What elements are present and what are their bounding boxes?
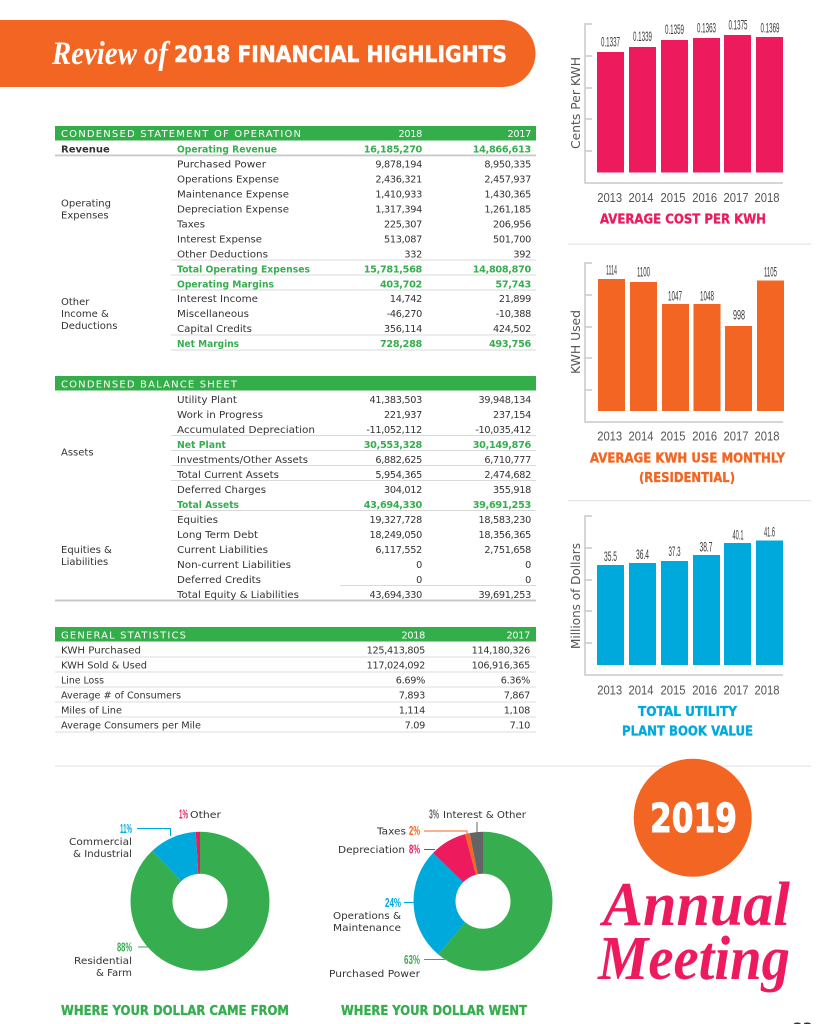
2018 values <box>367 646 425 732</box>
section labels: Equities & <box>61 545 112 556</box>
2017 values: 237,154 <box>493 410 531 421</box>
2017 values: 14,866,613 <box>473 144 531 156</box>
chart title: AVERAGE KWH USE MONTHLY <box>590 450 785 466</box>
year labels: 2017 <box>724 430 749 444</box>
table header: CONDENSED BALANCE SHEET <box>61 380 238 390</box>
statistic names: Line Loss <box>61 676 104 686</box>
bar chart: average cost per KWH <box>569 18 783 228</box>
2018 values: 6,882,625 <box>375 455 422 466</box>
2017 values: 0 <box>525 560 531 571</box>
line items: Work in Progress <box>177 410 263 421</box>
line items: Equities <box>177 515 218 526</box>
table header <box>55 376 536 390</box>
year labels: 2016 <box>692 430 717 444</box>
title banner <box>0 20 536 87</box>
bars <box>597 540 783 665</box>
chart title: PLANT BOOK VALUE <box>622 724 753 740</box>
axis title: KWH Used <box>569 310 583 374</box>
bars <box>598 279 784 411</box>
bar chart: average cost per KWH: 0.1369 <box>760 20 780 36</box>
2017 values: 14,808,870 <box>473 264 532 276</box>
2017 values: 6.36% <box>501 676 530 686</box>
2017 values: 6,710,777 <box>484 455 531 466</box>
orange year circle: 2019 <box>650 796 737 842</box>
value labels: 0.1339 <box>633 29 652 44</box>
label: taxes: 2% <box>409 823 420 838</box>
bar chart: average KWH use monthly: 1105 <box>764 264 777 280</box>
value labels: 1100 <box>637 264 650 280</box>
label: depreciation: 8% <box>409 842 420 856</box>
label: other: 1% <box>179 806 188 822</box>
year labels: 2015 <box>660 684 686 698</box>
2018 values: 43,694,330 <box>364 500 423 511</box>
line items: Other Deductions <box>177 250 268 260</box>
axis title: Millions of Dollars <box>569 543 583 649</box>
2017 values: 57,743 <box>495 280 531 290</box>
2018 values: 1,317,394 <box>375 204 422 216</box>
line items: Current Liabilities <box>177 545 268 556</box>
line items: Net Plant <box>177 440 226 451</box>
line items: Interest Expense <box>177 234 262 246</box>
2018 values: 18,249,050 <box>370 530 422 541</box>
section labels: Other <box>61 297 90 308</box>
year labels: 2014 <box>628 684 654 698</box>
year labels <box>597 191 780 205</box>
label: interest and other <box>429 806 527 822</box>
table header: 2018 <box>402 630 425 642</box>
value labels: 1047 <box>668 288 682 304</box>
2017 values: 355,918 <box>493 485 531 496</box>
value labels: 1048 <box>700 288 714 304</box>
line items: Total Equity & Liabilities <box>176 590 299 601</box>
2017 values <box>473 395 532 601</box>
label: commercial and industrial: Commercial <box>69 837 132 848</box>
line items: Accumulated Depreciation <box>177 425 315 436</box>
2018 values: 16,185,270 <box>364 144 423 156</box>
line items: Operating Revenue <box>177 144 277 156</box>
2017 values: 39,691,253 <box>479 590 531 601</box>
2018 values: 19,327,728 <box>370 515 422 526</box>
value labels: 38.7 <box>700 540 712 554</box>
label: interest and other: 3% <box>429 806 439 822</box>
2018 values: 0 <box>416 575 422 586</box>
2017 values: 30,149,876 <box>473 440 532 451</box>
line items: Miscellaneous <box>177 309 249 320</box>
label: commercial and industrial <box>69 821 132 860</box>
label: residential and farm: Residential <box>74 956 132 967</box>
2017 values: 392 <box>513 250 531 260</box>
label: depreciation <box>338 842 420 856</box>
leader lines <box>137 828 170 947</box>
line items: Deferred Credits <box>177 575 261 586</box>
2017 values <box>473 144 532 350</box>
label: taxes <box>376 823 420 838</box>
year labels: 2017 <box>724 684 749 698</box>
2018 values: 1,410,933 <box>375 190 422 200</box>
section labels: Income & <box>61 309 109 320</box>
line items: Interest Income <box>177 294 258 305</box>
2018 values: 30,553,328 <box>364 440 423 451</box>
label: residential and farm: 88% <box>117 940 132 954</box>
value labels: 0.1337 <box>601 34 620 50</box>
title banner: 2018 FINANCIAL HIGHLIGHTS <box>174 43 507 68</box>
script heading: Annual <box>599 871 791 939</box>
year labels: 2013 <box>597 430 622 444</box>
line items: Taxes <box>176 220 205 230</box>
statistic names: Average Consumers per Mile <box>61 720 201 732</box>
2018 values: 1,114 <box>399 706 425 716</box>
table header <box>55 627 536 642</box>
2018 values: -11,052,112 <box>366 425 422 436</box>
2018 values: 125,413,805 <box>367 646 425 656</box>
2017 values: 2,751,658 <box>484 545 531 556</box>
value labels <box>604 524 775 564</box>
panel: condensed balance sheet <box>55 376 536 602</box>
label: purchased power: Purchased Power <box>329 969 421 980</box>
2017 values: 1,108 <box>504 706 530 716</box>
2018 values: 117,024,092 <box>367 660 425 672</box>
section labels <box>61 144 117 332</box>
line items: Investments/Other Assets <box>177 455 308 466</box>
year labels <box>597 430 780 444</box>
2018 values: 7.09 <box>405 720 425 732</box>
value labels: 0.1375 <box>728 18 748 32</box>
section labels: Expenses <box>61 210 109 222</box>
line items: Long Term Debt <box>177 530 258 541</box>
table header: GENERAL STATISTICS <box>61 630 186 642</box>
2017 values: 1,430,365 <box>484 190 531 200</box>
value labels: 40.1 <box>732 528 744 542</box>
value labels: 0.1363 <box>697 20 716 36</box>
year labels: 2015 <box>660 430 686 444</box>
line items: Operations Expense <box>177 174 279 186</box>
2018 values: 6.69% <box>396 676 425 686</box>
table header: 2018 <box>399 129 422 140</box>
label: other: Other <box>190 810 222 821</box>
label: residential and farm <box>74 940 132 979</box>
section labels: Operating <box>61 198 111 210</box>
2017 values: 2,457,937 <box>484 174 531 186</box>
table header: 2017 <box>508 129 531 140</box>
statistic names: KWH Sold & Used <box>61 660 147 672</box>
line items: Maintenance Expense <box>177 190 289 200</box>
2017 values: 1,261,185 <box>484 204 531 216</box>
2018 values: 332 <box>404 250 422 260</box>
line items <box>176 395 315 601</box>
chart title: WHERE YOUR DOLLAR CAME FROM <box>61 1003 289 1019</box>
line items <box>176 144 310 350</box>
2018 values: -46,270 <box>387 309 422 320</box>
value labels: 998 <box>733 308 745 322</box>
2017 values: -10,388 <box>496 309 531 320</box>
line items: Total Assets <box>177 500 239 511</box>
label: operations and maintenance: Operations & <box>333 911 401 922</box>
2017 values: 18,583,230 <box>479 515 531 526</box>
chart title: (RESIDENTIAL) <box>639 470 735 486</box>
2018 values <box>364 395 423 601</box>
label: depreciation: Depreciation <box>338 845 405 856</box>
2018 values: 356,114 <box>384 324 422 335</box>
2017 values: 206,956 <box>493 220 531 230</box>
year labels: 2017 <box>724 191 749 205</box>
chart title: WHERE YOUR DOLLAR WENT <box>341 1003 528 1019</box>
year labels: 2016 <box>692 684 717 698</box>
2017 values: 39,948,134 <box>479 395 531 406</box>
2017 values: 2,474,682 <box>484 470 531 481</box>
bar chart: total utility plant book value <box>569 516 783 740</box>
bar chart: total utility plant book value: 41.6 <box>764 524 775 540</box>
value labels: 37.3 <box>668 544 680 559</box>
chart title <box>590 450 785 486</box>
year labels: 2018 <box>754 191 780 205</box>
leader lines <box>404 822 477 960</box>
table header <box>55 126 536 140</box>
year labels: 2013 <box>597 684 622 698</box>
section labels: Deductions <box>61 321 117 332</box>
year labels: 2015 <box>660 191 686 205</box>
2017 values: 7.10 <box>510 720 530 732</box>
year labels: 2013 <box>597 191 622 205</box>
year labels <box>597 684 780 698</box>
2017 values: 7,867 <box>504 690 530 702</box>
line items: Purchased Power <box>177 160 267 170</box>
2017 values: 501,700 <box>493 234 531 246</box>
2017 values: 18,356,365 <box>479 530 531 541</box>
2017 values: 424,502 <box>493 324 531 335</box>
section labels: Assets <box>61 448 94 458</box>
year labels: 2018 <box>754 430 780 444</box>
2018 values: 14,742 <box>390 294 422 305</box>
label: interest and other: Interest & Other <box>443 810 527 821</box>
donut chart: where your dollar came from: 11% <box>120 821 132 836</box>
2018 values <box>364 144 423 350</box>
2017 values: 114,180,326 <box>472 646 530 656</box>
value labels <box>601 18 780 50</box>
chart title: AVERAGE COST PER KWH <box>600 212 766 228</box>
2017 values: 21,899 <box>499 294 531 305</box>
line items: Utility Plant <box>177 395 237 406</box>
label: taxes: Taxes <box>376 826 406 838</box>
2018 values: 304,012 <box>384 485 422 496</box>
script heading: Meeting <box>597 925 790 993</box>
2018 values: 403,702 <box>380 280 422 290</box>
2018 values: 5,954,365 <box>375 470 422 481</box>
label: other <box>179 806 222 822</box>
line items: Net Margins <box>177 339 239 350</box>
value labels <box>606 262 777 322</box>
statistic names: Miles of Line <box>61 706 122 716</box>
2017 values: 39,691,253 <box>473 500 531 511</box>
donut chart: where your dollar came from <box>61 806 289 1019</box>
callout: 2019 annual meeting <box>597 759 791 993</box>
year labels: 2018 <box>754 684 780 698</box>
value labels: 36.4 <box>636 547 649 562</box>
2017 values: 0 <box>525 575 531 586</box>
section labels: Revenue <box>61 144 110 156</box>
chart title <box>622 704 753 740</box>
2017 values <box>472 646 530 732</box>
title banner: Review of <box>51 36 171 72</box>
line items: Operating Margins <box>177 280 274 290</box>
orange year circle <box>634 759 752 877</box>
panel: condensed statement of operation <box>55 126 536 350</box>
label: operations and maintenance: 24% <box>385 895 401 910</box>
statistic names: KWH Purchased <box>61 646 141 656</box>
statistic names <box>61 646 201 732</box>
label: commercial and industrial: & Industrial <box>73 849 132 860</box>
2018 values: 15,781,568 <box>364 264 423 276</box>
label: residential and farm: & Farm <box>96 968 132 979</box>
line items: Capital Credits <box>177 324 252 335</box>
line items: Depreciation Expense <box>177 204 289 216</box>
table header: CONDENSED STATEMENT OF OPERATION <box>61 129 301 140</box>
2017 values: 106,916,365 <box>472 660 530 672</box>
year labels: 2016 <box>692 191 717 205</box>
2018 values: 225,307 <box>384 220 422 230</box>
section labels <box>61 448 112 568</box>
2018 values: 43,694,330 <box>370 590 422 601</box>
donut chart: where your dollar went <box>329 806 532 1019</box>
section labels: Liabilities <box>61 557 108 568</box>
2018 values: 513,087 <box>384 234 422 246</box>
label: operations and maintenance: Maintenance <box>333 923 401 934</box>
bar chart: average KWH use monthly <box>569 262 785 486</box>
2018 values: 221,937 <box>384 410 422 421</box>
2018 values: 2,436,321 <box>375 174 422 186</box>
value labels: 35.5 <box>604 549 617 564</box>
year labels: 2014 <box>628 430 654 444</box>
value labels: 0.1359 <box>665 22 684 37</box>
axis title: Cents Per KWH <box>569 57 583 149</box>
2017 values: -10,035,412 <box>475 425 531 436</box>
2018 values: 7,893 <box>399 690 425 702</box>
donut segments <box>152 853 248 950</box>
script heading <box>597 871 791 993</box>
label: operations and maintenance <box>333 895 401 934</box>
2017 values: 493,756 <box>489 339 532 350</box>
donut segments <box>434 853 532 950</box>
2018 values: 0 <box>416 560 422 571</box>
value labels: 1114 <box>606 262 617 278</box>
line items: Total Operating Expenses <box>177 264 310 276</box>
label: purchased power <box>329 952 421 980</box>
statistic names: Average # of Consumers <box>61 690 181 702</box>
line items: Non-current Liabilities <box>177 560 291 571</box>
label: purchased power: 63% <box>404 952 420 967</box>
line items: Total Current Assets <box>176 470 279 481</box>
2018 values: 728,288 <box>380 339 423 350</box>
bars <box>597 35 783 172</box>
2018 values: 41,383,503 <box>370 395 422 406</box>
year labels: 2014 <box>628 191 654 205</box>
2018 values: 6,117,552 <box>375 545 422 556</box>
chart title: TOTAL UTILITY <box>638 704 737 720</box>
table header: 2017 <box>507 630 530 642</box>
2018 values: 9,878,194 <box>375 160 422 170</box>
2017 values: 8,950,335 <box>484 160 531 170</box>
panel: general statistics <box>55 627 536 732</box>
line items: Deferred Charges <box>177 485 266 496</box>
